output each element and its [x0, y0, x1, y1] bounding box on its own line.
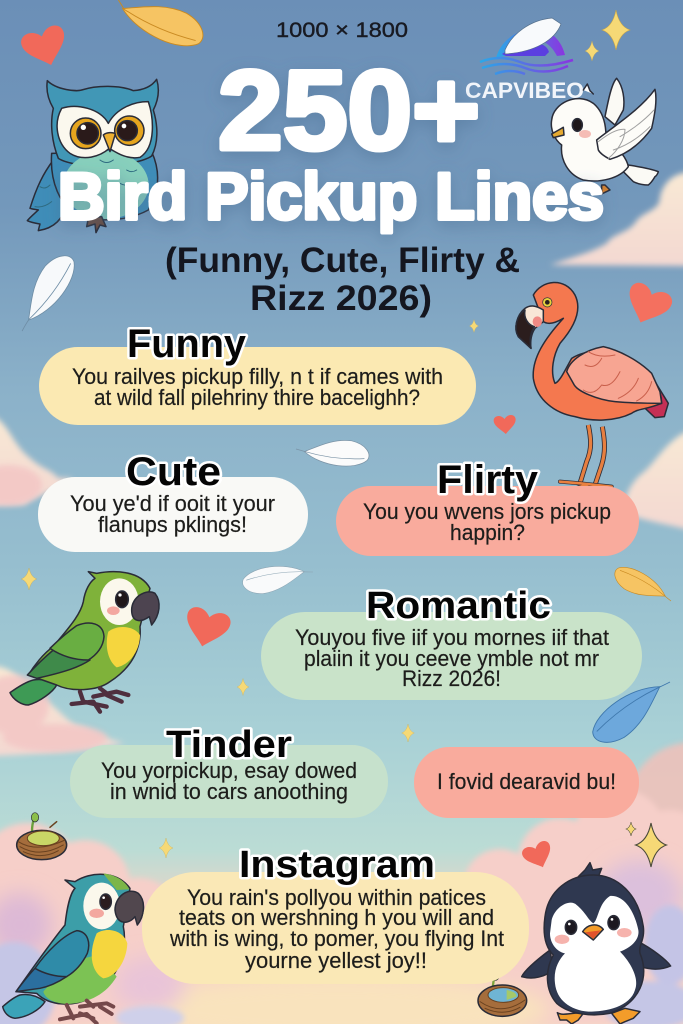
panel: instagram: with is wing, to pomer, you flying Int	[169, 926, 505, 951]
panel: tinder	[70, 724, 388, 818]
panel: funny: at wild fall pilehriny thire bacelighh?	[94, 385, 420, 410]
panel: cute: flanups pklings!	[98, 512, 247, 537]
illustration: teal and yellow parrot	[3, 873, 144, 1023]
subtitle: (Funny, Cute, Flirty &	[165, 241, 520, 280]
panel: cute: Cute	[126, 450, 221, 494]
illustration: flamingo	[516, 282, 668, 495]
icon: yellow feather top	[107, 0, 209, 56]
icon: white feather upper left	[5, 248, 83, 337]
panel: instagram: teats on wershning h you will and	[179, 905, 494, 930]
panel: funny: You railves pickup filly, n t if cames with	[72, 364, 443, 389]
title: Bird Pickup Lines: Bird Pickup Lines	[58, 159, 604, 233]
illustration: green parrot	[10, 572, 159, 712]
panel: instagram	[142, 844, 529, 984]
icon: white feather middle	[241, 562, 315, 596]
panel: romantic: Romantic	[366, 585, 551, 627]
icon: heart middle	[181, 605, 232, 652]
panel: tinder: Tinder	[166, 724, 292, 766]
panel: flirty: Flirty	[437, 458, 539, 502]
title: 250+: 250+	[218, 48, 480, 173]
panel: flirty	[336, 458, 639, 556]
subtitle: Rizz 2026)	[250, 279, 432, 318]
panel: romantic	[261, 585, 642, 700]
logo wordmark: CAPVIBEO	[465, 78, 584, 103]
icon: small heart	[493, 415, 517, 435]
icon: heart upper right	[620, 280, 675, 331]
panel: coral message	[414, 747, 639, 818]
logo: Capvibeo emblem	[480, 18, 573, 74]
subtitle	[165, 241, 520, 318]
panel: flirty: You you wvens jors pickup	[363, 499, 611, 524]
panel: cute	[38, 450, 308, 552]
panel: flirty: happin?	[450, 520, 525, 545]
panel: romantic: plaiin it you ceeve ymble not mr	[304, 646, 599, 671]
icon: nest bottom right	[478, 972, 527, 1016]
panel: instagram: You rain's pollyou within patices	[187, 885, 486, 910]
panel: romantic: Rizz 2026!	[402, 666, 501, 691]
panel: funny	[39, 322, 476, 425]
icon: white feather centre	[295, 433, 371, 470]
icon: heart lower right	[520, 839, 556, 873]
illustration: owl	[27, 79, 158, 233]
panel: coral message: I fovid dearavid bu!	[437, 769, 616, 794]
panel: tinder: You yorpickup, esay dowed	[101, 758, 357, 783]
panel: instagram: yourne yellest joy!!	[245, 948, 427, 973]
sparkles	[21, 10, 666, 867]
icon: yellow feather right	[610, 561, 676, 613]
illustration: white dove	[551, 78, 658, 194]
illustration: penguin	[522, 863, 671, 1024]
icon: nest top left	[17, 813, 67, 860]
icon: blue feather	[585, 671, 681, 751]
panel: cute: You ye'd if ooit it your	[70, 491, 275, 516]
icon: heart top left	[19, 23, 72, 72]
panel: romantic: Youyou five iif you mornes iif that	[295, 625, 610, 650]
panel: instagram: Instagram	[239, 844, 435, 886]
panel: tinder: in wnid to cars anoothing	[110, 779, 348, 804]
panel: funny: Funny	[127, 322, 247, 366]
size note: 1000 × 1800	[276, 18, 408, 42]
